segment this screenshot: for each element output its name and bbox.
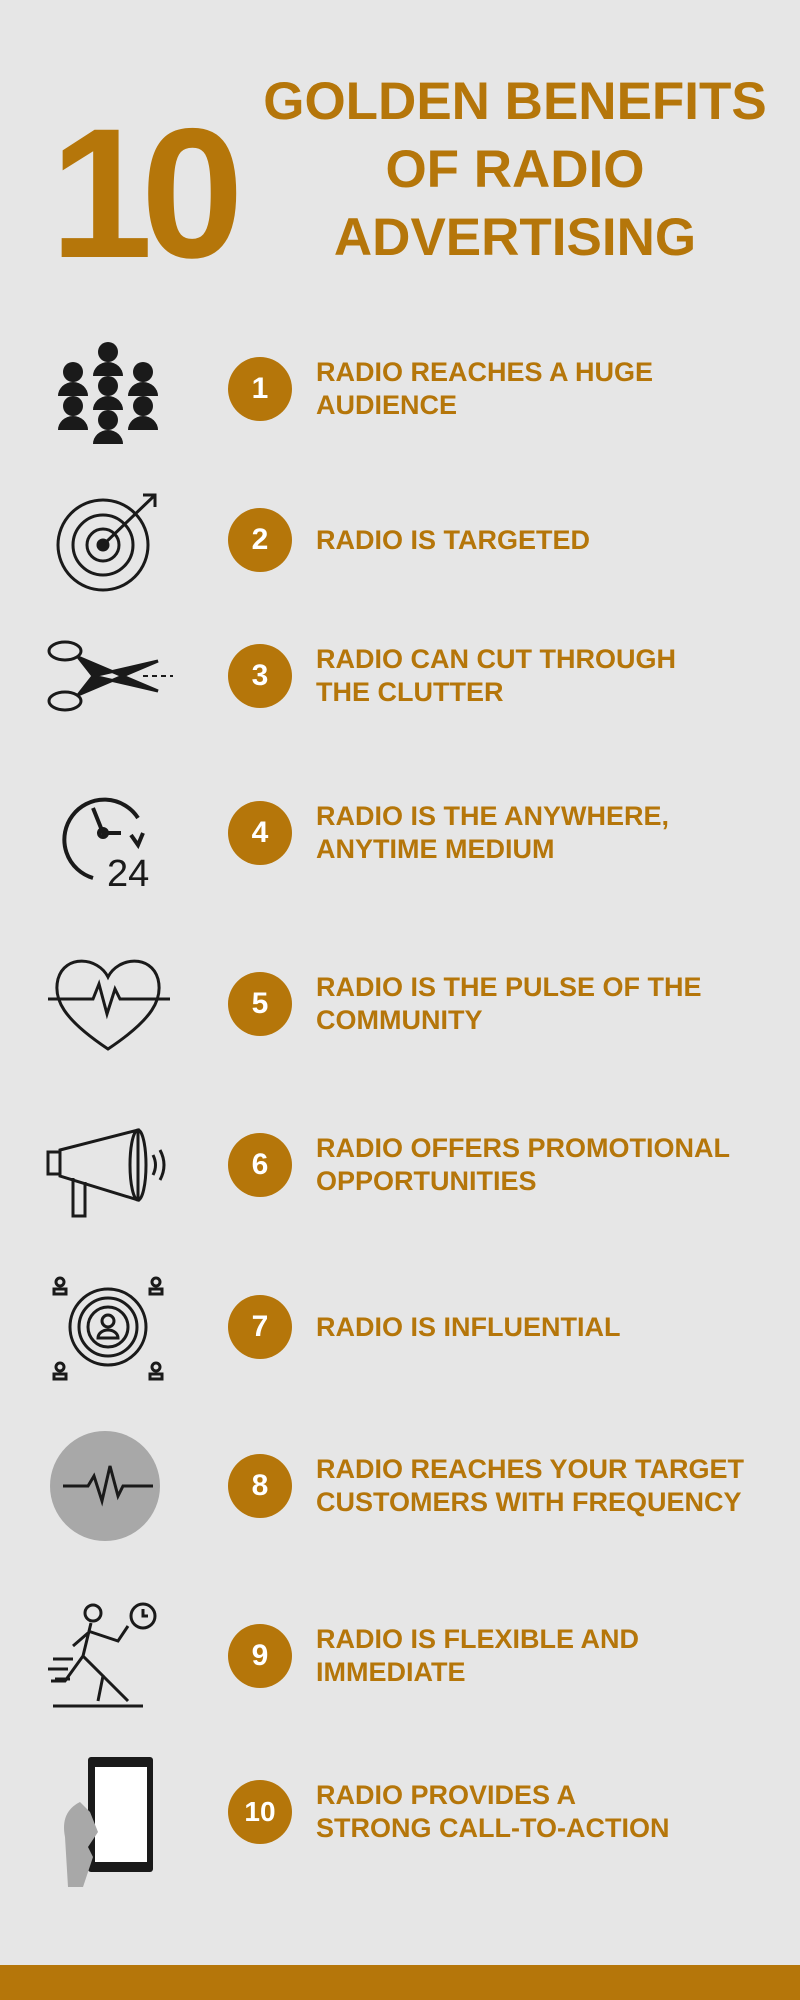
number 8	[228, 1454, 292, 1518]
icon: target	[56, 494, 156, 592]
icon: heart pulse	[48, 960, 170, 1051]
text 3: RADIO CAN CUT THROUGH	[316, 644, 676, 674]
number 1	[228, 357, 292, 421]
text 6: RADIO OFFERS PROMOTIONAL	[316, 1133, 730, 1163]
text 10: RADIO PROVIDES A	[316, 1780, 576, 1810]
number 4: 4	[252, 816, 268, 849]
text 1: AUDIENCE	[316, 390, 457, 420]
title: OF RADIO	[385, 140, 645, 199]
item 10	[64, 1757, 669, 1887]
text 9: IMMEDIATE	[316, 1657, 466, 1687]
text 5: RADIO IS THE PULSE OF THE	[316, 972, 702, 1002]
item 4	[62, 798, 669, 888]
text 7: RADIO IS INFLUENTIAL	[316, 1312, 620, 1342]
number 8: 8	[252, 1469, 268, 1502]
number 5	[228, 972, 292, 1036]
item 8	[50, 1431, 744, 1541]
icon: phone in hand	[64, 1757, 153, 1887]
text 1: RADIO REACHES A HUGE	[316, 357, 653, 387]
number 7	[228, 1295, 292, 1359]
text 5: COMMUNITY	[316, 1005, 482, 1035]
text 10	[316, 1780, 669, 1843]
text 1	[316, 357, 653, 420]
number 10: 10	[244, 1796, 276, 1827]
text 8: RADIO REACHES YOUR TARGET	[316, 1454, 744, 1484]
number 1: 1	[252, 372, 268, 405]
text 6: OPPORTUNITIES	[316, 1166, 537, 1196]
text 9: RADIO IS FLEXIBLE AND	[316, 1624, 639, 1654]
text 8	[316, 1454, 744, 1517]
text 3: THE CLUTTER	[316, 677, 503, 707]
item 1	[58, 342, 653, 444]
item 3	[48, 640, 676, 712]
title: ADVERTISING	[334, 208, 696, 267]
number 10	[228, 1780, 292, 1844]
number 4	[228, 801, 292, 865]
title	[263, 72, 767, 267]
text 9	[316, 1624, 639, 1687]
number 6	[228, 1133, 292, 1197]
number 3: 3	[252, 659, 268, 692]
text 8: CUSTOMERS WITH FREQUENCY	[316, 1487, 742, 1517]
number 9: 9	[252, 1639, 268, 1672]
title number: 10	[50, 91, 232, 297]
text 6	[316, 1133, 730, 1196]
icon: influencer	[52, 1276, 164, 1380]
text 4	[316, 801, 669, 864]
item 9	[48, 1602, 639, 1708]
item 6	[46, 1128, 730, 1218]
number 7: 7	[252, 1310, 268, 1343]
text 4: RADIO IS THE ANYWHERE,	[316, 801, 669, 831]
icon: audience	[58, 342, 158, 444]
text 5	[316, 972, 702, 1035]
number 3	[228, 644, 292, 708]
number 5: 5	[252, 987, 268, 1020]
text 2: RADIO IS TARGETED	[316, 524, 590, 554]
number 9	[228, 1624, 292, 1688]
footer bar	[0, 1965, 800, 2000]
icon: 24h clock	[62, 798, 149, 888]
text 3	[316, 644, 676, 707]
icon: running man with clock	[48, 1602, 156, 1708]
icon: frequency wave	[50, 1431, 160, 1541]
icon: megaphone	[46, 1128, 166, 1218]
title: GOLDEN BENEFITS	[263, 72, 767, 131]
text 10: STRONG CALL-TO-ACTION	[316, 1813, 669, 1843]
text 4: ANYTIME MEDIUM	[316, 834, 554, 864]
item 2	[56, 494, 590, 592]
number 2: 2	[252, 523, 268, 556]
item 5	[48, 960, 702, 1051]
item 7	[52, 1276, 620, 1380]
icon: scissors	[48, 640, 173, 712]
number 2	[228, 508, 292, 572]
number 6: 6	[252, 1148, 268, 1181]
